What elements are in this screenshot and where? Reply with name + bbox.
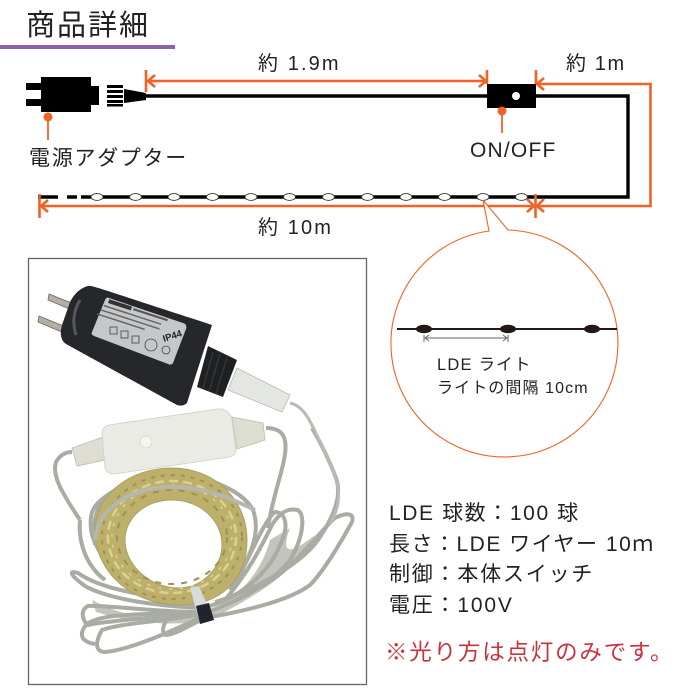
adapter label — [92, 298, 186, 365]
photo frame — [28, 258, 366, 684]
photo: cable across coil — [95, 487, 255, 540]
photo: clear cable bundle — [55, 428, 353, 652]
title: 商品詳細 — [26, 9, 150, 42]
label: ON/OFF: ON/OFF — [470, 139, 557, 162]
panel: specifications — [385, 502, 674, 665]
label: 約 1.9m: 約 1.9m — [258, 52, 341, 75]
panel: wiring diagram — [26, 52, 650, 239]
adapter prongs — [38, 294, 74, 333]
label: 約 1m: 約 1m — [566, 52, 626, 75]
wire with bulbs — [397, 325, 617, 333]
photo: clear connector — [228, 368, 290, 412]
adapter body — [61, 286, 212, 406]
dashed cable end — [38, 195, 77, 199]
title — [0, 9, 175, 49]
photo: cable fan shading — [92, 528, 315, 624]
note: lighting mode: ※光り方は点灯のみです。 — [385, 640, 674, 665]
spacing arrow — [424, 335, 508, 342]
photo: yellow LED wire coil — [95, 468, 247, 605]
callout text — [437, 356, 589, 397]
callout: LED spacing detail — [391, 200, 618, 457]
spec: control: 制御：本体スイッチ — [389, 563, 594, 586]
adapter label text — [97, 297, 168, 336]
photo: threaded collar — [197, 346, 237, 397]
icon: switch box — [487, 84, 536, 108]
label: adapter: 電源アダプター — [29, 147, 188, 170]
label: 約 10m: 約 10m — [258, 216, 333, 239]
photo: cable to switch — [290, 403, 338, 524]
photo: power adapter — [38, 286, 212, 406]
spec: voltage: 電圧：100V — [389, 594, 514, 617]
callout text: ライトの間隔 10cm — [437, 379, 589, 397]
adapter pointer — [44, 112, 52, 140]
LED bulbs — [91, 194, 528, 200]
callout bubble — [391, 200, 618, 457]
black cable loop — [81, 96, 628, 197]
label: IP44: IP44 — [162, 328, 184, 345]
spec: bulb count: LDE 球数：100 球 — [389, 502, 580, 525]
switch pointer — [498, 106, 506, 133]
dimension arrows — [39, 70, 650, 218]
callout text: LDE ライト — [437, 356, 532, 374]
adapter highlight — [74, 300, 80, 335]
spec: length: 長さ：LDE ワイヤー 10ｍ — [389, 533, 655, 556]
photo: cable tie — [190, 586, 214, 624]
adapter certification marks — [110, 327, 170, 354]
panel: product photo — [28, 258, 366, 684]
photo: white switch box — [72, 409, 265, 474]
icon: power adapter — [26, 77, 146, 112]
